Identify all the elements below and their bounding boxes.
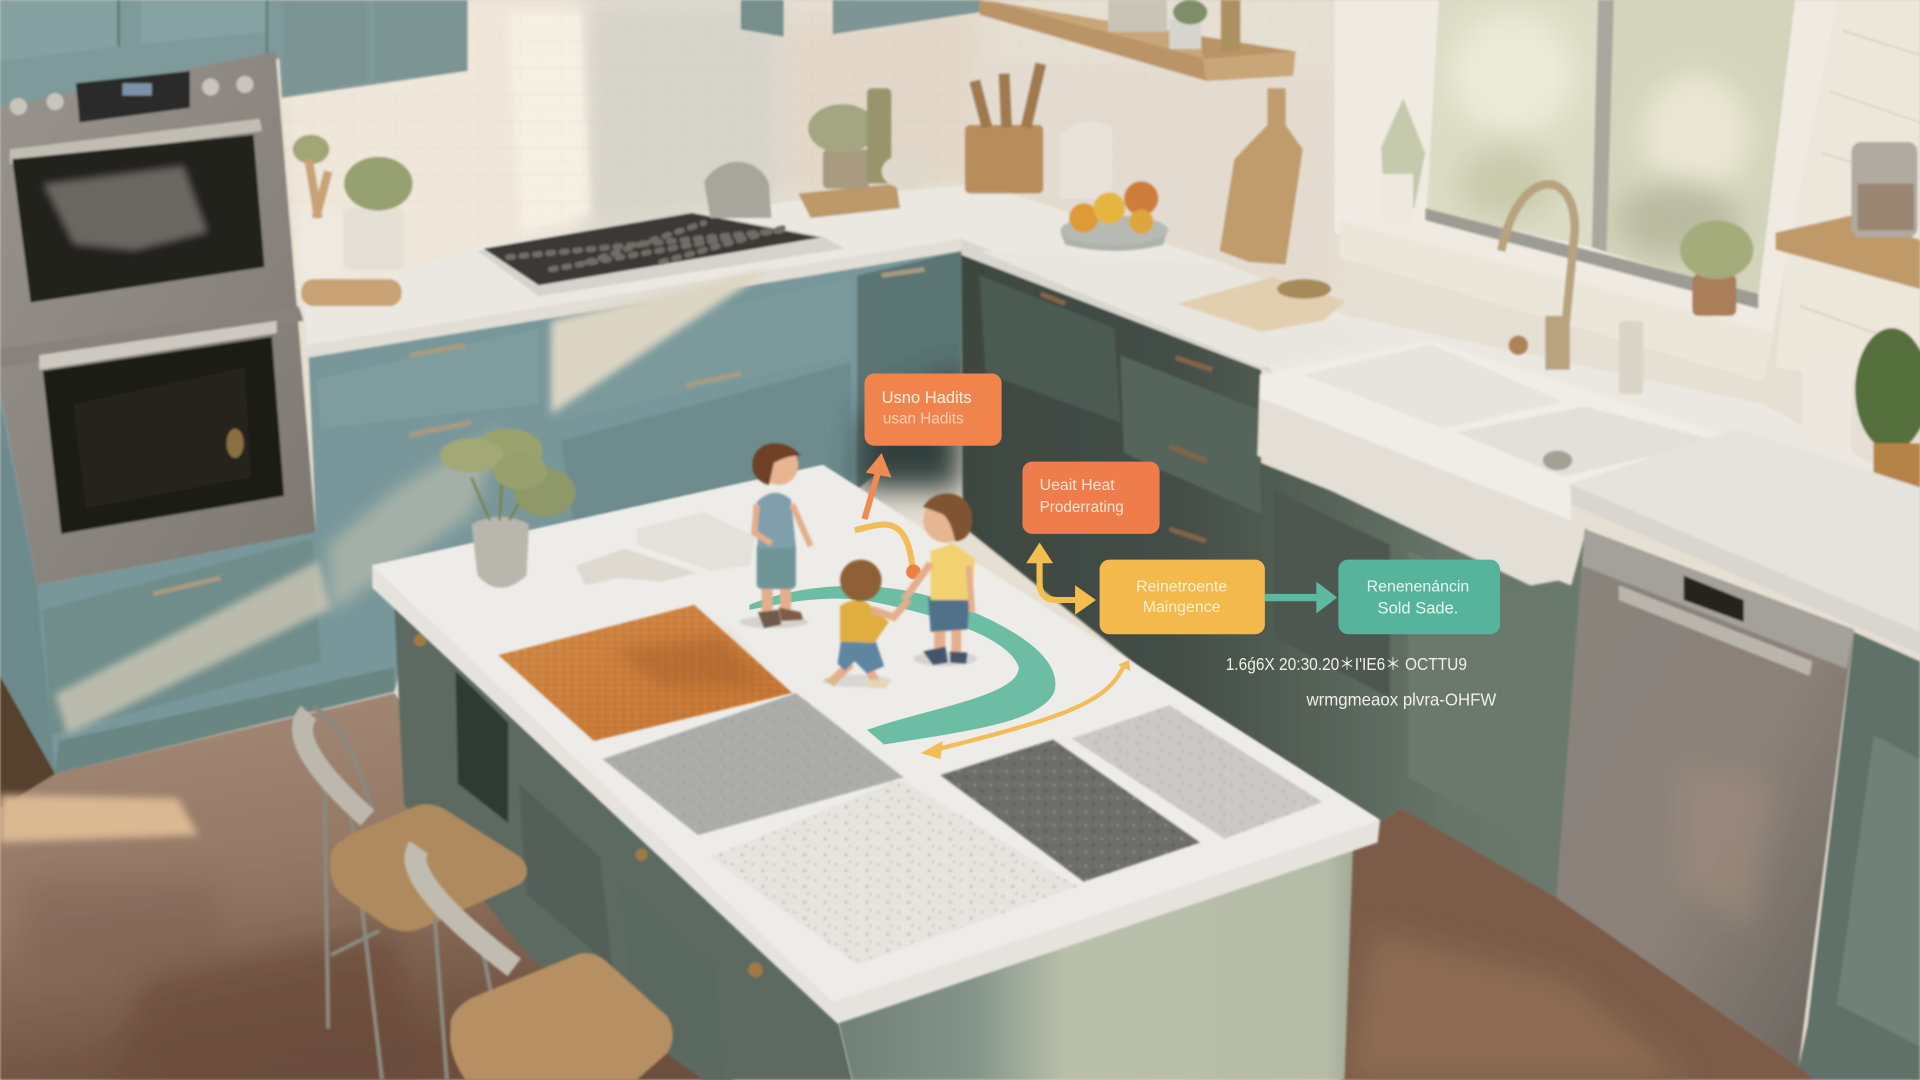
window	[1335, 0, 1837, 382]
box: maintenance: Maingence	[1143, 599, 1221, 616]
box: heat processing: Proderrating	[1040, 499, 1124, 516]
box: usage habits: usan Hadits	[883, 411, 964, 428]
box: maintenance: Reinetroente	[1136, 578, 1227, 595]
upper cabinets	[0, 0, 980, 108]
island top	[372, 465, 1380, 1024]
right cabinet	[1799, 632, 1920, 1080]
floor left	[0, 676, 735, 1080]
slab: light grey	[1071, 705, 1322, 839]
green path	[749, 586, 1055, 744]
box: usage habits	[864, 373, 1002, 446]
box: maintenance	[1100, 560, 1265, 634]
stool 2	[415, 847, 673, 1080]
arrow: maintenance to sold	[1265, 582, 1337, 613]
child right	[904, 493, 977, 666]
box: sold: Renenenáncin	[1367, 578, 1469, 595]
potted plant	[440, 429, 576, 588]
slab: grey	[602, 693, 904, 835]
child small	[823, 560, 909, 688]
box: usage habits: Usno Hadits	[882, 388, 972, 407]
caption line two: wrmgmeaox plvra-OHFW	[1306, 689, 1497, 709]
stone samples	[576, 512, 756, 585]
island left side	[394, 606, 852, 1080]
orange arrow up	[864, 453, 891, 519]
dishwasher	[1556, 529, 1854, 1067]
caption line one: 1.6ǵ6X 20:30.20＊I'IE6＊ OCTTU9	[1226, 654, 1467, 674]
slab: orange	[498, 605, 792, 741]
left lower cabinets	[0, 251, 961, 774]
stool 1	[302, 708, 527, 1080]
island front side	[838, 828, 1380, 1080]
oven	[0, 51, 316, 585]
cooktop	[478, 211, 845, 296]
farmhouse sink	[1258, 184, 1731, 585]
kitchen island	[372, 429, 1380, 1080]
yellow curved arrow	[921, 660, 1130, 759]
counter accessories	[293, 64, 1920, 512]
box: heat processing	[1022, 462, 1160, 534]
box: sold: Sold Sade.	[1378, 598, 1458, 617]
arrow: maintenance to heat	[1026, 542, 1096, 615]
back counter	[304, 184, 1920, 649]
right cabinets	[961, 255, 1587, 904]
box: heat processing: Ueait Heat	[1040, 477, 1115, 494]
slab: white speckle	[710, 779, 1078, 965]
shelves	[980, 0, 1920, 289]
slab: dark	[940, 740, 1200, 882]
child left	[740, 443, 811, 628]
yellow squiggle arrow	[855, 525, 921, 579]
right counter	[1566, 429, 1920, 654]
box: sold	[1338, 560, 1500, 634]
floor right	[1341, 808, 1815, 1080]
